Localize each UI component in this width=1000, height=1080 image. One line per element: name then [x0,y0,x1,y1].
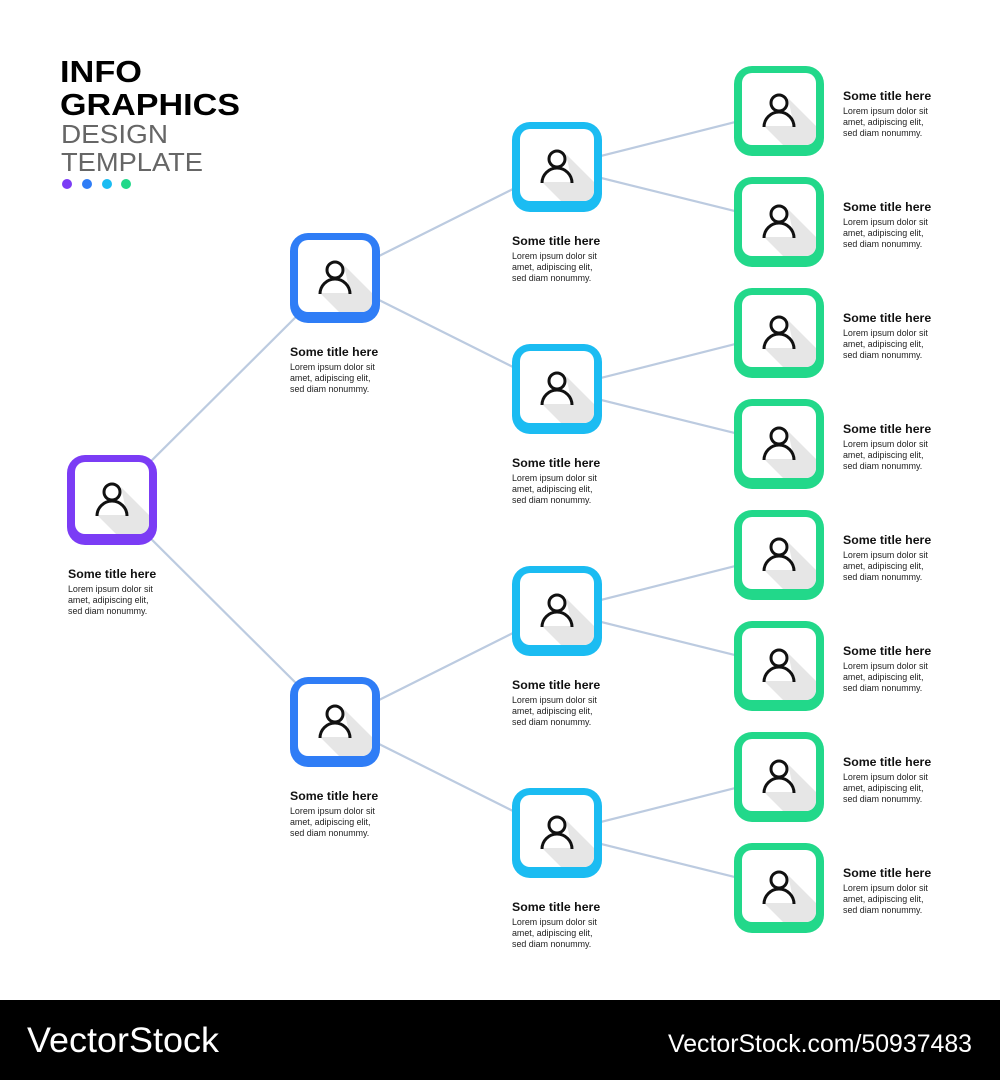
node L3 7 [734,732,931,822]
node L0: Lorem ipsum dolor sit [68,584,153,594]
node L2 2: Lorem ipsum dolor sit [512,473,597,483]
node L3 2: Some title here [843,200,931,214]
node L2 1 [512,122,602,283]
node L3 7: amet, adipiscing elit, [843,783,923,793]
node L1 bottom: Lorem ipsum dolor sit [290,806,375,816]
node L0: sed diam nonummy. [68,606,147,616]
node L3 7: sed diam nonummy. [843,794,922,804]
node L2 3: amet, adipiscing elit, [512,706,592,716]
title: DESIGN [61,119,168,149]
node L3 3: Some title here [843,311,931,325]
node L0 [67,455,157,616]
node L3 6: Some title here [843,644,931,658]
node L1 top: amet, adipiscing elit, [290,373,370,383]
node L2 2 [512,344,602,505]
node L2 2: amet, adipiscing elit, [512,484,592,494]
footer bar: VectorStock [27,1021,220,1060]
color dots [62,179,131,189]
node L3 3 [734,288,931,378]
node L3 1 [734,66,931,156]
node L2 1: amet, adipiscing elit, [512,262,592,272]
node L2 3: sed diam nonummy. [512,717,591,727]
node L3 5: sed diam nonummy. [843,572,922,582]
node L3 3: amet, adipiscing elit, [843,339,923,349]
node L3 2: amet, adipiscing elit, [843,228,923,238]
node L3 6 [734,621,931,711]
node L3 1: amet, adipiscing elit, [843,117,923,127]
node L3 1: sed diam nonummy. [843,128,922,138]
node L3 2 [734,177,931,267]
node L0: amet, adipiscing elit, [68,595,148,605]
node L3 8: sed diam nonummy. [843,905,922,915]
node L3 5: Some title here [843,533,931,547]
node L2 3: Some title here [512,678,600,692]
node L3 3: Lorem ipsum dolor sit [843,328,928,338]
node L2 1: Lorem ipsum dolor sit [512,251,597,261]
node L3 5: amet, adipiscing elit, [843,561,923,571]
node L2 4: amet, adipiscing elit, [512,928,592,938]
node L3 4 [734,399,931,489]
node L3 7: Some title here [843,755,931,769]
title: GRAPHICS [60,87,240,122]
node L3 1: Lorem ipsum dolor sit [843,106,928,116]
node L3 5 [734,510,931,600]
node L3 2: sed diam nonummy. [843,239,922,249]
node L2 4: Lorem ipsum dolor sit [512,917,597,927]
node L3 8: Lorem ipsum dolor sit [843,883,928,893]
node L3 7: Lorem ipsum dolor sit [843,772,928,782]
node L1 bottom [290,677,380,838]
node L1 bottom: sed diam nonummy. [290,828,369,838]
node L1 top: Lorem ipsum dolor sit [290,362,375,372]
node L3 4: amet, adipiscing elit, [843,450,923,460]
node L3 8: amet, adipiscing elit, [843,894,923,904]
node L1 top: Some title here [290,345,378,359]
title [60,54,240,177]
node L3 2: Lorem ipsum dolor sit [843,217,928,227]
node L2 4: Some title here [512,900,600,914]
node L1 bottom: Some title here [290,789,378,803]
node L2 1: Some title here [512,234,600,248]
node L3 3: sed diam nonummy. [843,350,922,360]
node L3 8: Some title here [843,866,931,880]
node L1 top: sed diam nonummy. [290,384,369,394]
node L3 4: Some title here [843,422,931,436]
node L2 1: sed diam nonummy. [512,273,591,283]
node L3 6: amet, adipiscing elit, [843,672,923,682]
title: TEMPLATE [61,147,203,177]
footer bar [0,1000,1000,1080]
node L3 1: Some title here [843,89,931,103]
connector lines [112,111,779,888]
node L3 5: Lorem ipsum dolor sit [843,550,928,560]
node L2 3: Lorem ipsum dolor sit [512,695,597,705]
node L3 8 [734,843,931,933]
node L2 2: Some title here [512,456,600,470]
node L2 4: sed diam nonummy. [512,939,591,949]
node L0: Some title here [68,567,156,581]
footer bar: VectorStock.com/50937483 [668,1030,972,1058]
title: INFO [60,54,142,89]
node L2 2: sed diam nonummy. [512,495,591,505]
node L1 bottom: amet, adipiscing elit, [290,817,370,827]
node L3 6: Lorem ipsum dolor sit [843,661,928,671]
node L3 4: Lorem ipsum dolor sit [843,439,928,449]
node L2 3 [512,566,602,727]
node L2 4 [512,788,602,949]
node L3 4: sed diam nonummy. [843,461,922,471]
node L1 top [290,233,380,394]
node L3 6: sed diam nonummy. [843,683,922,693]
